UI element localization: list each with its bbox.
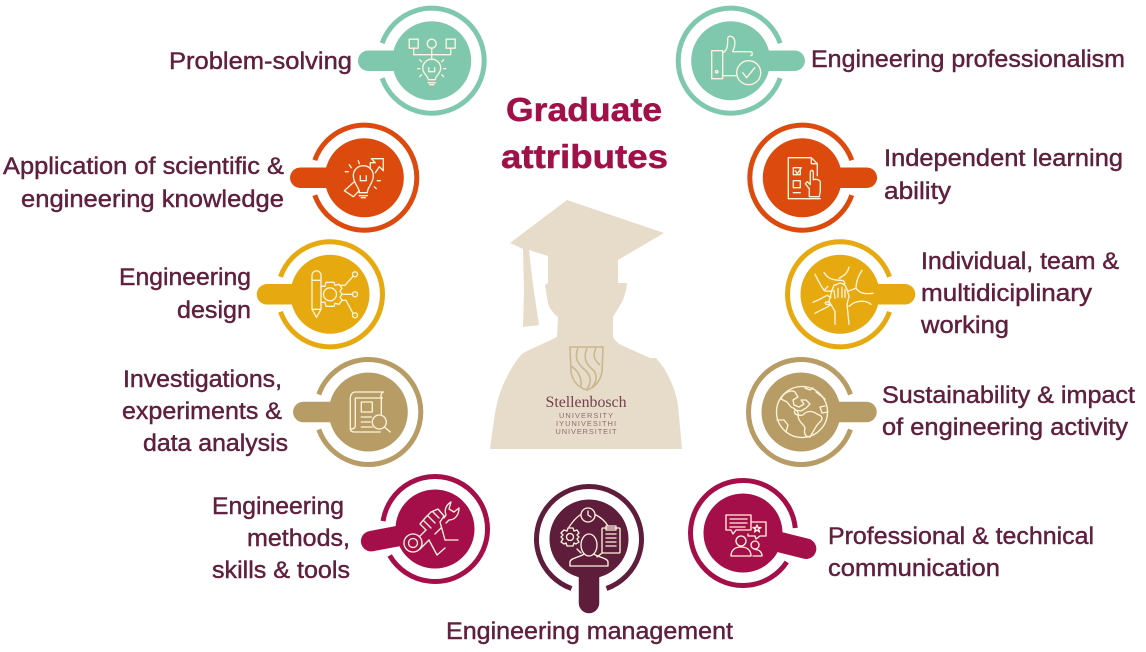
badge: problem-solving [368, 8, 484, 113]
label: application of scientific and engineering knowledge: Application of scientific & [3, 153, 284, 180]
badge: engineering professionalism [678, 8, 795, 113]
icon: flowchart and light bulb [409, 39, 455, 85]
label: application of scientific and engineering knowledge [3, 153, 284, 213]
label: individual, team and multidisciplinary working: Individual, team & [921, 248, 1119, 275]
label: independent learning ability: ability [884, 178, 951, 205]
icon: pencil, gear and nodes [312, 271, 358, 318]
label: engineering methods, skills and tools: Engineering [212, 493, 344, 520]
label: individual, team and multidisciplinary working: working [920, 312, 1009, 339]
badge: sustainability and impact of engineering activity [749, 360, 866, 464]
icon: manager with clock, gear and clipboard [561, 508, 620, 566]
icon: bulb with arrow [344, 159, 383, 198]
icon: thumbs up with check [712, 36, 761, 85]
university name: IYUNIVESITHI [556, 419, 616, 428]
university shield logo [570, 347, 603, 390]
title [501, 91, 668, 175]
icon: people with speech bubbles [726, 515, 766, 556]
label: engineering methods, skills and tools: skills & tools [212, 557, 350, 584]
university name: UNIVERSITY [559, 411, 613, 420]
label: sustainability and impact of engineering activity: Sustainability & impact [882, 382, 1135, 409]
university name: Stellenbosch [546, 394, 626, 411]
label: sustainability and impact of engineering activity [882, 382, 1135, 441]
label: independent learning ability: Independent learning [884, 145, 1123, 172]
label: investigations, experiments and data analysis [122, 366, 288, 457]
icon: scroll and magnifier [350, 392, 390, 432]
label: professional and technical communication: Professional & technical [828, 523, 1094, 550]
title: attributes [501, 138, 668, 175]
badge: individual, team and multidisciplinary working [788, 242, 905, 347]
label: engineering management: Engineering management [446, 618, 733, 645]
icon: hand holding wrench [404, 502, 459, 555]
badge: professional and technical communication [679, 469, 819, 600]
icon: globe [776, 386, 828, 438]
label: professional and technical communication: communication [828, 555, 1000, 582]
university name: UNIVERSITEIT [556, 427, 617, 436]
badge: engineering methods, skills and tools [361, 468, 496, 593]
label: individual, team and multidisciplinary working [920, 248, 1119, 339]
label: investigations, experiments and data analysis: experiments & [122, 398, 282, 425]
label: engineering methods, skills and tools [212, 493, 350, 584]
label: engineering design: design [177, 297, 251, 324]
label: professional and technical communication [828, 523, 1094, 582]
badge: engineering design [267, 242, 382, 347]
badge: investigations, experiments and data analysis [303, 360, 421, 464]
icon: checklist and pointing hand [788, 158, 820, 199]
label: individual, team and multidisciplinary working: multidiciplinary [921, 280, 1092, 307]
title: Graduate [506, 91, 662, 128]
label: engineering design: Engineering [119, 264, 251, 291]
graduate silhouette with university logo [490, 200, 682, 449]
label: independent learning ability [884, 145, 1123, 205]
label: investigations, experiments and data analysis: data analysis [143, 430, 288, 457]
label: engineering methods, skills and tools: methods, [247, 525, 350, 552]
badge: application of scientific and engineering knowledge [300, 125, 417, 230]
label: engineering design [119, 264, 251, 324]
label: engineering professionalism: Engineering professionalism [811, 46, 1125, 73]
label: problem-solving: Problem-solving [169, 48, 352, 75]
university name [546, 394, 626, 436]
label: application of scientific and engineering knowledge: engineering knowledge [21, 186, 284, 213]
label: sustainability and impact of engineering activity: of engineering activity [882, 414, 1128, 441]
icon: stacked hands [813, 267, 873, 324]
label: investigations, experiments and data analysis: Investigations, [123, 366, 282, 393]
badge: independent learning ability [750, 125, 867, 230]
badge: engineering management [536, 487, 642, 603]
